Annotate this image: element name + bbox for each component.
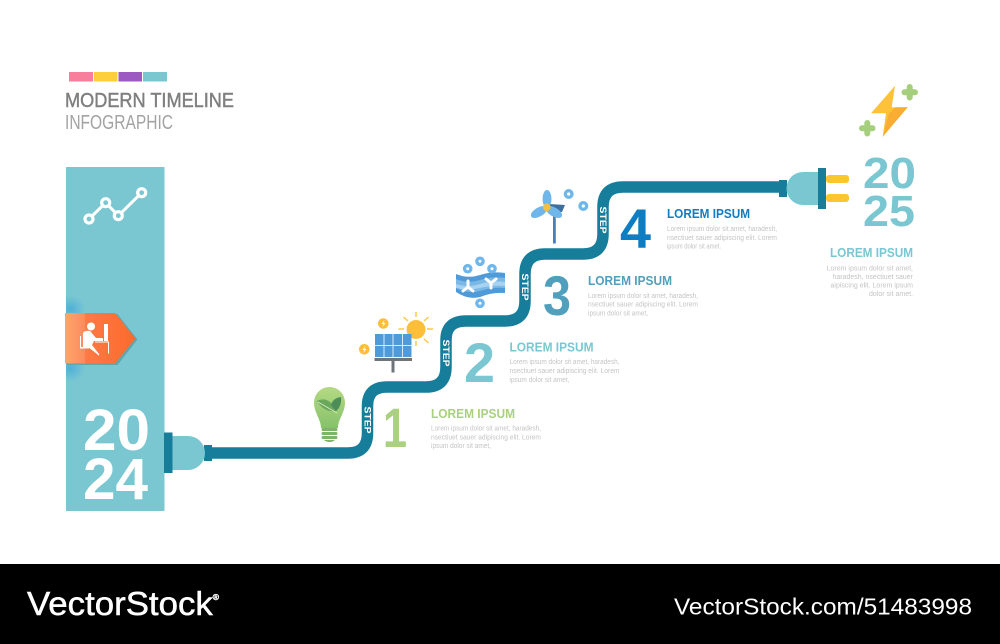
text block 4: ipsum dolor sit amet. <box>667 244 721 250</box>
step 3 <box>543 264 698 327</box>
number 2: 2 <box>464 331 495 394</box>
panel: 2024 start column <box>66 167 164 512</box>
footer band <box>0 564 1000 644</box>
number 3: 3 <box>543 264 571 327</box>
year 2025 <box>863 149 916 236</box>
step labels on cable: STEP <box>519 274 530 301</box>
2025 text block: dolor sit amet. <box>869 291 913 298</box>
icon: wind turbine <box>529 189 588 244</box>
step labels on cable: STEP <box>597 206 608 234</box>
heading 2: LOREM IPSUM <box>510 340 594 354</box>
text block 2: nsectiuet sauer adipiscing elit. Lorem <box>510 368 620 375</box>
text block 4: Lorem ipsum dolor sit amet, haradesh, <box>667 226 777 233</box>
title <box>65 90 234 134</box>
title: MODERN TIMELINE <box>65 90 234 112</box>
number 1: 1 <box>383 396 407 459</box>
cable path connecting plugs <box>205 187 785 453</box>
icon: solar panel and sun <box>359 312 433 372</box>
year 2024 <box>83 398 150 512</box>
heading 3: LOREM IPSUM <box>588 274 672 288</box>
2025 text block: Lorem ipsum dolor sit amet, <box>827 266 913 272</box>
text block 3: ipsum dolor sit amet, <box>588 310 648 318</box>
text block 2: ipsum dolor sit amet, <box>510 377 570 384</box>
icon: line chart <box>85 189 146 223</box>
text block 3: Lorem ipsum dolor sit amet, haradesh, <box>588 293 698 300</box>
footer logo: VectorStock <box>27 585 203 622</box>
step 2 <box>464 331 620 394</box>
step labels on cable: STEP <box>440 340 451 367</box>
footer url: VectorStock.com/51483998 <box>674 594 972 620</box>
heading 4: LOREM IPSUM <box>667 207 750 221</box>
step labels on cable: STEP <box>361 406 372 434</box>
icon: water with underwater turbines <box>456 256 505 308</box>
step 1 <box>383 396 541 459</box>
icon: person at desk <box>80 322 109 356</box>
number 4: 4 <box>620 197 651 260</box>
2025 heading: LOREM IPSUM <box>830 246 913 260</box>
colour swatch bar <box>69 72 167 82</box>
text block 1: Lorem ipsum dolor sit amet, haradesh, <box>431 426 541 432</box>
text block 4: nsectiuet sauer adipiscing elit. Lorem <box>667 235 777 242</box>
icon: green leaf light bulb <box>314 387 345 442</box>
year 2024: 20 <box>83 398 150 463</box>
text block 3: nsectiuet sauer adipiscing elit. Lorem <box>588 302 698 308</box>
2025 text block: haradesh, nsectiuet sauer <box>832 274 914 281</box>
year 2024: 24 <box>83 447 148 512</box>
icon: lightning bolt with plus signs <box>862 86 915 137</box>
text block 1: ipsum dolor sit amet, <box>431 443 491 450</box>
step labels on cable <box>361 206 608 434</box>
heading 1: LOREM IPSUM <box>431 407 515 421</box>
year 2025: 20 <box>863 149 916 198</box>
title: INFOGRAPHIC <box>65 112 173 134</box>
footer logo: ® <box>213 593 219 602</box>
text block 2: Lorem ipsum dolor sit amet, haradesh, <box>510 359 620 366</box>
right plug <box>779 168 849 209</box>
2025 text block <box>827 266 914 298</box>
text block 4 <box>667 226 777 250</box>
left plug <box>164 432 212 473</box>
2025 text block: aipiscing elit. Lorem ipsum <box>831 282 913 290</box>
text block 3 <box>588 293 698 318</box>
text block 1: nsectiuet sauer adipiscing elit. Lorem <box>431 434 541 442</box>
step 4 <box>620 197 777 260</box>
orange tag with person at desk icon <box>65 298 138 379</box>
year 2025: 25 <box>863 187 915 236</box>
text block 2 <box>510 359 620 384</box>
text block 1 <box>431 426 541 450</box>
